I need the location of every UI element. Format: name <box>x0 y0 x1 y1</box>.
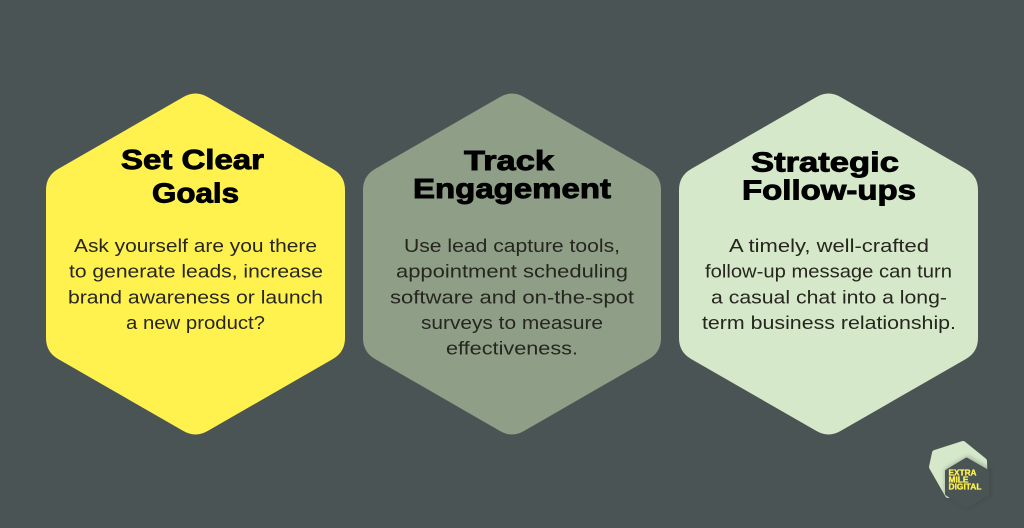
body text: strategic follow-ups: A timely, well-crafted <box>729 236 929 256</box>
hexagon: sage <box>363 94 661 434</box>
heading: track engagement: Engagement <box>413 173 611 204</box>
body text: track engagement: software and on-the-spot <box>390 287 634 307</box>
logo hexagon shadow <box>945 456 991 509</box>
panel: set clear goals <box>46 94 345 434</box>
logo wordmark <box>948 468 982 491</box>
hexagon: yellow <box>46 94 345 434</box>
body text: strategic follow-ups <box>702 236 956 333</box>
panel: strategic follow-ups <box>679 94 978 434</box>
heading: set clear goals: Set Clear <box>121 144 264 175</box>
logo wordmark: DIGITAL <box>948 481 982 491</box>
body text: track engagement: Use lead capture tools, <box>404 236 620 256</box>
body text: track engagement: surveys to measure <box>421 313 603 333</box>
body text: set clear goals: Ask yourself are you there <box>74 236 317 256</box>
heading: track engagement <box>413 145 611 204</box>
body text: track engagement <box>390 236 634 359</box>
logo wordmark: MILE <box>948 474 969 484</box>
logo wordmark: EXTRA <box>948 468 976 478</box>
body text: set clear goals: a new product? <box>126 313 265 333</box>
hexagon: light green <box>679 94 978 434</box>
heading: set clear goals: Goals <box>152 178 239 208</box>
body text: strategic follow-ups: follow-up message can turn <box>705 262 952 282</box>
body text: strategic follow-ups: a casual chat into a long- <box>711 287 947 307</box>
heading: track engagement: Track <box>464 145 555 176</box>
logo backing shape <box>932 444 985 495</box>
body text: strategic follow-ups: term business relationship. <box>702 313 956 333</box>
panel: track engagement <box>363 94 661 434</box>
heading: strategic follow-ups: Strategic <box>751 147 899 178</box>
body text: track engagement: appointment scheduling <box>396 262 628 282</box>
body text: set clear goals: to generate leads, increase <box>69 262 323 282</box>
body text: set clear goals: brand awareness or launch <box>68 287 323 307</box>
heading: strategic follow-ups: Follow-ups <box>742 174 916 205</box>
logo hexagon <box>946 459 988 507</box>
logo: extra mile digital <box>932 444 991 509</box>
heading: strategic follow-ups <box>742 147 916 205</box>
body text: track engagement: effectiveness. <box>446 339 578 359</box>
body text: set clear goals <box>68 236 323 333</box>
heading: set clear goals <box>121 144 264 208</box>
